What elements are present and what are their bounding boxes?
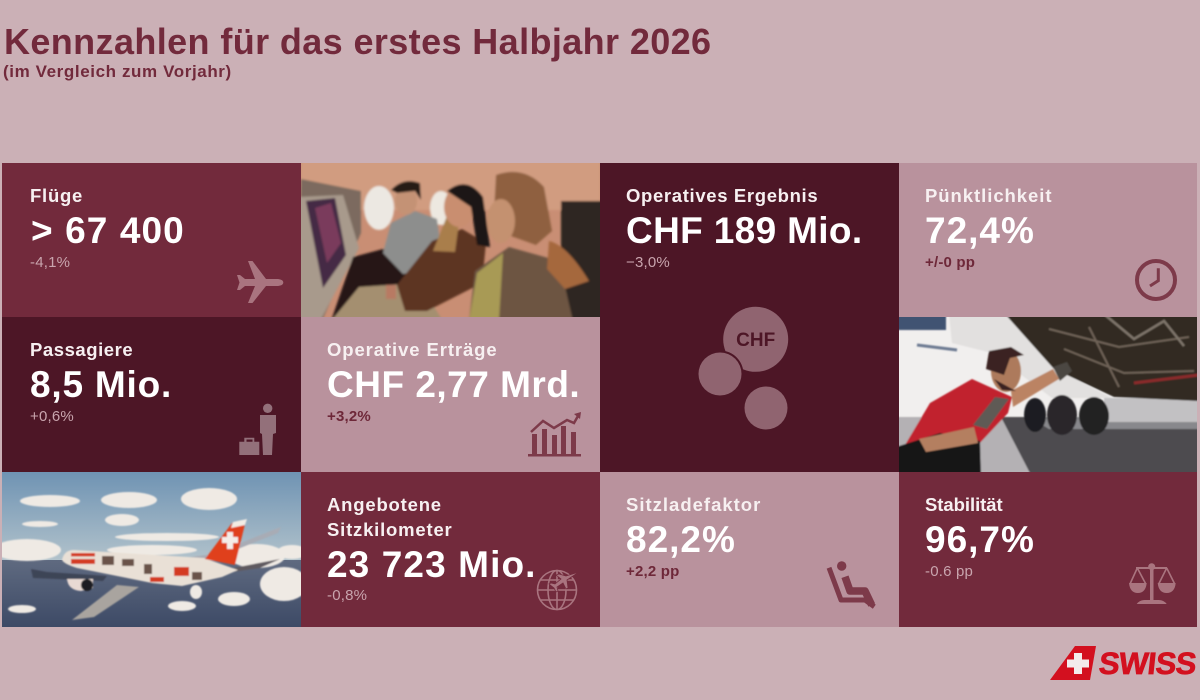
panel: Passagiere — [2, 317, 301, 472]
panel: Pünktlichkeit — [899, 163, 1197, 317]
panel: Sitzladefaktor — [600, 472, 899, 627]
panel: Stabilität: Stabilität — [925, 494, 1003, 515]
title: Kennzahlen für das erstes Halbjahr 2026 — [4, 21, 711, 62]
panel: Passagiere: +0,6% — [30, 408, 74, 425]
panel: Stabilität — [899, 472, 1197, 627]
panel: photo aircraft — [2, 472, 301, 627]
panel: Operatives Ergebnis: Operatives Ergebnis — [626, 185, 818, 206]
panel: Sitzladefaktor: +2,2 pp — [626, 563, 680, 580]
wordmark: SWISS — [1097, 646, 1198, 681]
panel: photo cabin — [301, 163, 600, 317]
panel: photo mechanic — [899, 317, 1197, 472]
panel: Operatives Ergebnis: CHF 189 Mio. — [626, 210, 863, 251]
icon: airplane — [237, 261, 284, 303]
panel: Operatives Ergebnis: −3,0% — [626, 254, 670, 271]
icon: CHF coins: CHF — [736, 330, 775, 351]
panel: Sitzladefaktor: 82,2% — [626, 519, 736, 560]
panel: Angebotene Sitzkilometer — [301, 472, 600, 627]
panel: Stabilität: -0.6 pp — [925, 563, 973, 580]
icon: CHF coins — [698, 306, 788, 430]
panel: Pünktlichkeit: 72,4% — [925, 210, 1035, 251]
panel: Angebotene Sitzkilometer: Sitzkilometer — [327, 519, 453, 540]
panel: Operative Erträge: Operative Erträge — [327, 339, 498, 360]
panel: Flüge: Flüge — [30, 185, 83, 206]
panel: Pünktlichkeit: Pünktlichkeit — [925, 185, 1052, 206]
panel: Angebotene Sitzkilometer: 23 723 Mio. — [327, 544, 537, 585]
panel: Angebotene Sitzkilometer: Angebotene — [327, 494, 442, 515]
panel: Passagiere: 8,5 Mio. — [30, 364, 172, 405]
panel: Sitzladefaktor: Sitzladefaktor — [626, 494, 761, 515]
panel: Flüge: > 67 400 — [31, 210, 185, 251]
icon: growth chart — [528, 412, 581, 456]
panel: Stabilität: 96,7% — [925, 519, 1035, 560]
panel: Angebotene Sitzkilometer: -0,8% — [327, 587, 367, 604]
panel: Passagiere: Passagiere — [30, 339, 133, 360]
panel: Pünktlichkeit: +/-0 pp — [925, 254, 975, 271]
icon: globe with airplane — [536, 570, 578, 610]
icon: seat — [826, 561, 876, 609]
subtitle: (im Vergleich zum Vorjahr) — [3, 62, 232, 81]
panel: Flüge: -4,1% — [30, 254, 70, 271]
panel: Operative Erträge — [301, 317, 600, 472]
icon: passenger with suitcase — [239, 404, 276, 455]
icon: clock — [1135, 259, 1177, 301]
icon: tail fin — [1050, 646, 1096, 680]
panel: Operatives Ergebnis — [600, 163, 899, 472]
icon: scales — [1129, 563, 1176, 604]
panel: Flüge — [2, 163, 301, 317]
logo: SWISS — [1050, 646, 1198, 681]
panel: Operative Erträge: +3,2% — [327, 408, 371, 425]
panel: Operative Erträge: CHF 2,77 Mrd. — [327, 364, 580, 405]
